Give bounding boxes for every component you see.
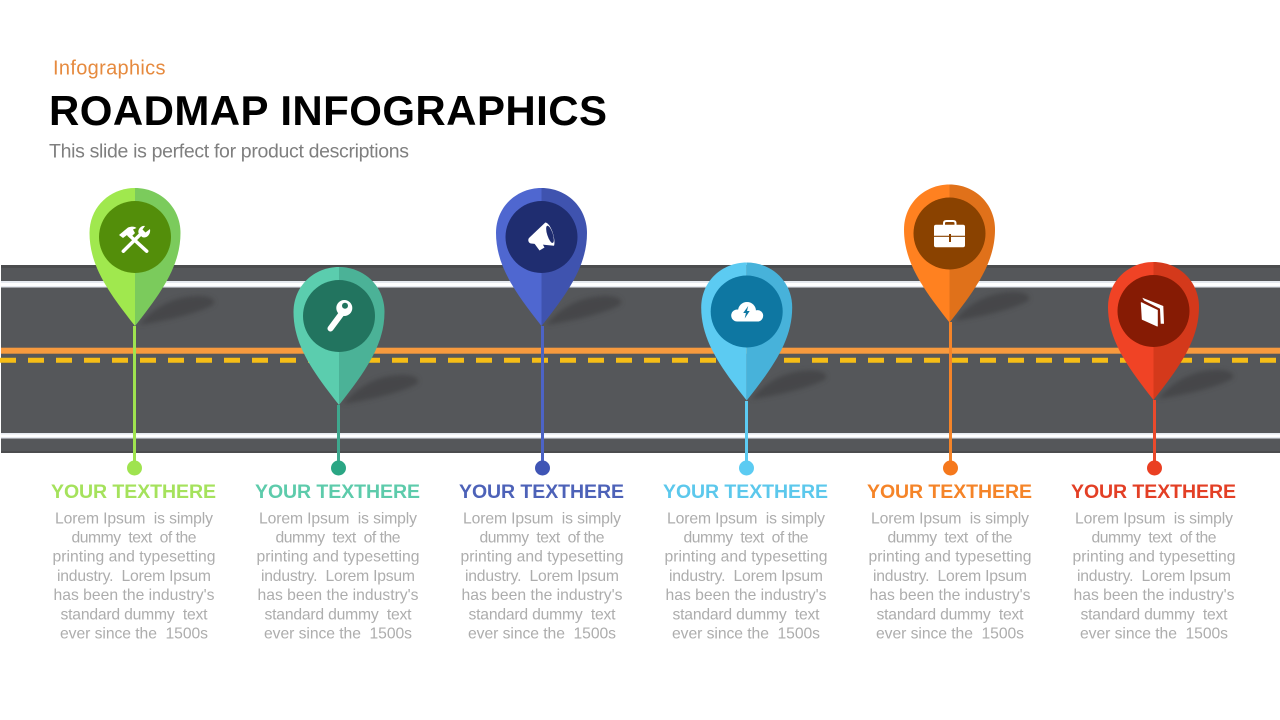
- text block 2: [255, 481, 420, 642]
- text block 4: has been the industry's: [666, 587, 827, 604]
- text block 4: printing and typesetting: [664, 548, 828, 566]
- text block 4: ever since the 1500s: [672, 626, 820, 642]
- text block 5: dummy text of the: [888, 530, 1013, 546]
- text block 3: ever since the 1500s: [468, 626, 616, 642]
- text block 6: standard dummy text: [1080, 606, 1228, 624]
- text block 3: printing and typesetting: [460, 548, 624, 566]
- text block 6: [1071, 481, 1236, 642]
- text block 6: dummy text of the: [1092, 530, 1217, 546]
- icon: hammer and wrench: [119, 226, 150, 251]
- location pin 6: book: [1108, 262, 1233, 476]
- text block 6: Lorem Ipsum is simply: [1075, 510, 1233, 528]
- icon: book: [1141, 298, 1164, 326]
- text block 3: [459, 481, 624, 642]
- text block 3: Lorem Ipsum is simply: [463, 510, 621, 528]
- text block 4: dummy text of the: [684, 530, 809, 546]
- text block 6: ever since the 1500s: [1080, 626, 1228, 642]
- text block 2: industry. Lorem Ipsum: [261, 568, 415, 585]
- text block 3: standard dummy text: [468, 606, 616, 624]
- text block 5: has been the industry's: [870, 587, 1031, 604]
- text block 1: YOUR TEXTHERE: [51, 481, 216, 503]
- text block 2: ever since the 1500s: [264, 626, 412, 642]
- text block 5: [867, 481, 1032, 642]
- text block 3: YOUR TEXTHERE: [459, 481, 624, 503]
- location pin 5: briefcase: [904, 184, 1029, 476]
- text block 3: has been the industry's: [462, 587, 623, 604]
- location pin 1: tools: [90, 188, 214, 476]
- text block 6: has been the industry's: [1074, 587, 1235, 604]
- location pin 2: key: [294, 267, 418, 476]
- icon: briefcase: [934, 221, 965, 247]
- text block 4: YOUR TEXTHERE: [663, 481, 828, 503]
- text block 2: dummy text of the: [276, 530, 401, 546]
- text block 4: [663, 481, 828, 642]
- text block 5: Lorem Ipsum is simply: [871, 510, 1029, 528]
- text block 2: printing and typesetting: [256, 548, 420, 566]
- icon: key: [330, 300, 352, 328]
- text block 4: Lorem Ipsum is simply: [667, 510, 825, 528]
- road: [0, 265, 1280, 453]
- title: ROADMAP INFOGRAPHICS: [49, 87, 607, 134]
- text block 6: industry. Lorem Ipsum: [1077, 568, 1231, 585]
- icon: megaphone: [528, 222, 555, 250]
- text block 1: standard dummy text: [60, 606, 208, 624]
- text block 4: standard dummy text: [672, 606, 820, 624]
- text block 5: standard dummy text: [876, 606, 1024, 624]
- icon: cloud with lightning bolt: [731, 302, 763, 322]
- text block 6: printing and typesetting: [1072, 548, 1236, 566]
- text block 2: Lorem Ipsum is simply: [259, 510, 417, 528]
- location pin 3: megaphone: [496, 188, 621, 476]
- text block 5: printing and typesetting: [868, 548, 1032, 566]
- text block 6: YOUR TEXTHERE: [1071, 481, 1236, 503]
- text block 5: ever since the 1500s: [876, 626, 1024, 642]
- text block 1: Lorem Ipsum is simply: [55, 510, 213, 528]
- subtitle: This slide is perfect for product descriptions: [49, 140, 409, 162]
- text block 1: dummy text of the: [72, 530, 197, 546]
- text block 2: has been the industry's: [258, 587, 419, 604]
- location pin 4: cloud: [701, 262, 826, 476]
- text block 1: printing and typesetting: [52, 548, 216, 566]
- text block 2: standard dummy text: [264, 606, 412, 624]
- eyebrow label: Infographics: [53, 58, 166, 80]
- text block 3: dummy text of the: [480, 530, 605, 546]
- text block 2: YOUR TEXTHERE: [255, 481, 420, 503]
- text block 1: has been the industry's: [54, 587, 215, 604]
- text block 5: industry. Lorem Ipsum: [873, 568, 1027, 585]
- text block 1: ever since the 1500s: [60, 626, 208, 642]
- text block 1: [51, 481, 216, 642]
- text block 4: industry. Lorem Ipsum: [669, 568, 823, 585]
- text block 3: industry. Lorem Ipsum: [465, 568, 619, 585]
- text block 1: industry. Lorem Ipsum: [57, 568, 211, 585]
- text block 5: YOUR TEXTHERE: [867, 481, 1032, 503]
